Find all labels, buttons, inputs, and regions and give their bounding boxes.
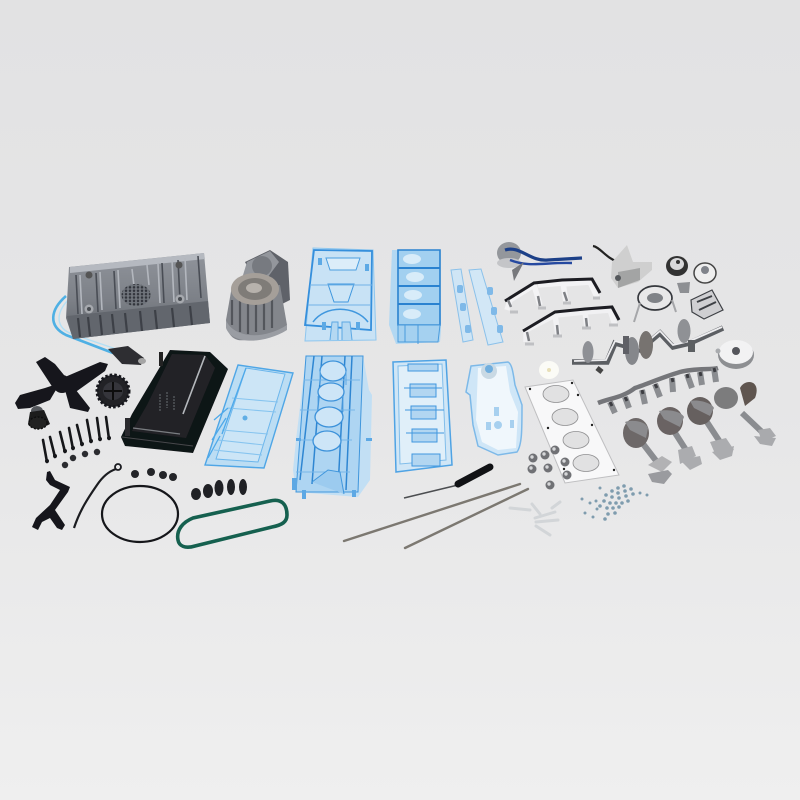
clear blue top frame sprue <box>305 248 376 341</box>
distributor with blue wires <box>497 242 582 281</box>
pistons and connecting rods <box>623 382 776 484</box>
black cable tie <box>74 464 121 528</box>
small black fasteners <box>62 449 100 468</box>
small pinion gear <box>28 406 50 429</box>
chrome exhaust manifold upper <box>505 279 600 312</box>
long steel rods <box>344 484 528 548</box>
timing gear housing <box>226 250 290 341</box>
chrome bracket <box>691 290 723 319</box>
chrome pulleys <box>666 256 716 293</box>
chrome water pump <box>634 286 676 322</box>
clear small plastic pins <box>510 502 560 535</box>
screwdriver <box>404 467 490 498</box>
blue intake runner sprue <box>389 250 441 344</box>
green timing belt <box>178 500 287 547</box>
oil pan with blue wire <box>53 253 210 365</box>
white plastic washer <box>539 361 559 379</box>
chrome crankshaft <box>572 319 723 372</box>
chrome exhaust manifold lower <box>523 307 619 344</box>
fan blade <box>15 357 108 412</box>
black valve cover <box>121 350 228 453</box>
chrome crank pulley <box>716 340 754 369</box>
black o-ring <box>102 486 178 542</box>
small black clips row <box>131 468 177 481</box>
white cylinder plate with four holes <box>525 380 619 483</box>
clear engine front cover <box>466 362 522 455</box>
chrome bolts cluster <box>528 446 572 490</box>
black screws <box>43 417 111 463</box>
clear valve strip sprues <box>451 269 503 345</box>
black wrench lever <box>32 471 70 530</box>
clear blue cylinder block sprue <box>292 356 372 499</box>
chrome rocker arm strip <box>598 368 718 413</box>
blue clear cover panel <box>205 365 293 468</box>
clear rocker tray sprue <box>393 360 452 472</box>
blue-silver small screws pile <box>580 484 648 521</box>
black spur gear <box>97 375 129 407</box>
ignition coil with black wire <box>593 245 652 288</box>
black clip set <box>191 479 247 500</box>
